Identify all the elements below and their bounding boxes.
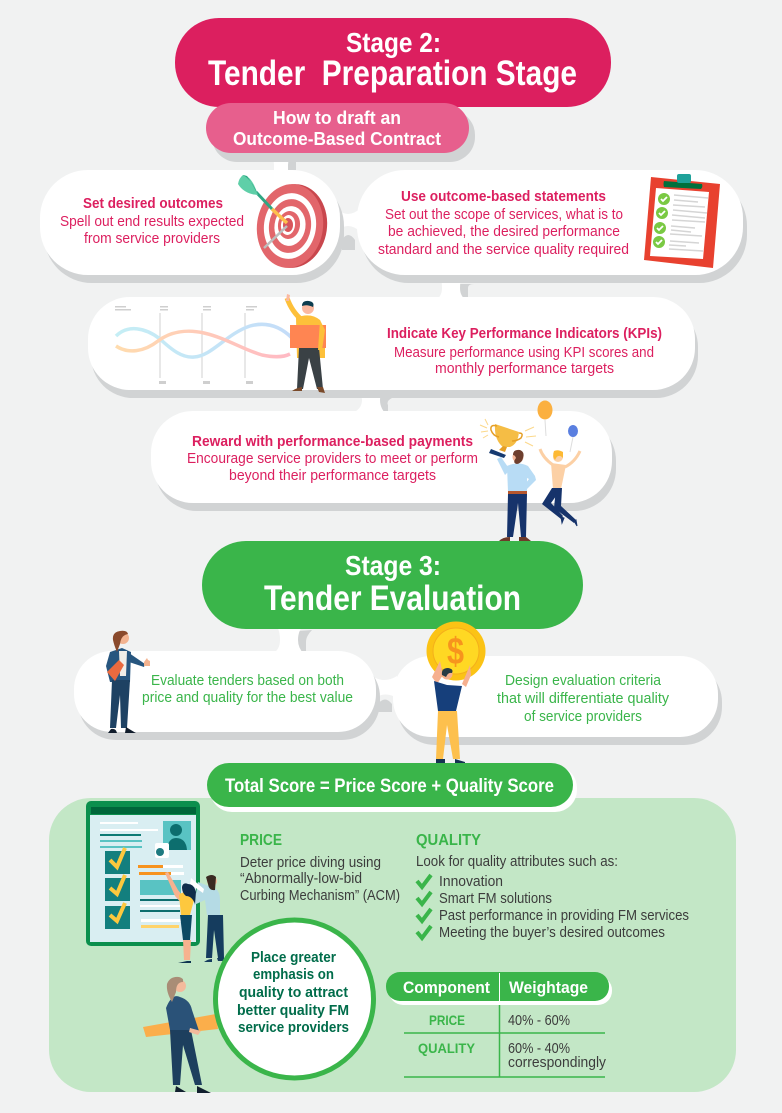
panel: price and quality evaluation: Evaluate tenders based on both (151, 672, 344, 689)
price block: Curbing Mechanism” (ACM) (240, 887, 400, 904)
connector shadows and links (268, 150, 474, 712)
panel: design evaluation criteria: Design evaluation criteria (505, 672, 662, 689)
table: component weightage: Weightage (509, 978, 588, 997)
illustration: woman carrying ruler (143, 977, 218, 1093)
stage 3 title pill (202, 541, 583, 629)
sub-heading text: How to draft an (273, 108, 401, 128)
panel: key performance indicators: monthly performance targets (435, 360, 614, 377)
table row: price: PRICE (429, 1012, 465, 1028)
table: component weightage: Component (403, 978, 490, 997)
price block (240, 832, 400, 904)
panel: score breakdown (49, 798, 736, 1092)
quality checklist: Meeting the buyer’s desired outcomes (439, 924, 665, 941)
callout: greater emphasis on quality: quality to attract (239, 984, 348, 1001)
table: component weightage: correspondingly (508, 1054, 606, 1071)
illustration: two colleagues at the tablet (165, 872, 224, 963)
price description: Deter price diving using (240, 854, 381, 871)
sub-heading pill: Outcome-Based Contract (233, 129, 441, 149)
quality checklist: Smart FM solutions (439, 890, 552, 907)
panel: outcome-based statements (357, 170, 747, 283)
price block: PRICE (240, 832, 282, 849)
quality checklist: Innovation (439, 873, 503, 890)
panel: performance-based payments: beyond their performance targets (229, 467, 436, 484)
quality checklist (417, 873, 689, 941)
icon: clipboard checklist (644, 174, 720, 268)
quality introduction: Look for quality attributes such as: (416, 853, 618, 870)
statements description: Set out the scope of services, what is to (385, 206, 623, 223)
callout: greater emphasis on quality: better quality FM (237, 1002, 349, 1019)
panel: set desired outcomes (40, 170, 344, 283)
KPI description: Measure performance using KPI scores and (394, 344, 654, 361)
callout: greater emphasis on quality: service providers (238, 1019, 349, 1036)
quality block (416, 832, 689, 941)
stage 2 heading: Tender Preparation Stage (208, 54, 577, 93)
icon: target with dart (238, 175, 333, 272)
panel: set desired outcomes: Set desired outcomes (83, 195, 223, 212)
panel: price and quality evaluation: price and quality for the best value (142, 689, 353, 706)
panel: design evaluation criteria: that will differentiate quality (497, 690, 669, 707)
payments description: Encourage service providers to meet or perform (187, 450, 478, 467)
callout: greater emphasis on quality: Place greater (251, 949, 336, 966)
panel: key performance indicators: Indicate Key Performance Indicators (KPIs) (387, 325, 662, 342)
panel: outcome-based statements: be achieved, the desired performance (388, 223, 620, 240)
callout: greater emphasis on quality: emphasis on (253, 966, 334, 983)
illustration: celebrating people with trophy and balloons (480, 400, 580, 541)
panel: set desired outcomes: from service providers (84, 230, 220, 247)
quality block: QUALITY (416, 832, 481, 849)
illustration: man lifting gold coin (426, 622, 486, 763)
panel: design evaluation criteria (393, 656, 722, 745)
panel: outcome-based statements: standard and the service quality required (378, 241, 629, 258)
panel: performance-based payments: Reward with performance-based payments (192, 433, 473, 450)
table: component weightage (386, 972, 612, 1077)
stage 2 title pill (175, 18, 611, 107)
total score pill (207, 763, 577, 812)
panel: performance-based payments (151, 411, 616, 511)
stage 3 label: Stage 3: (345, 550, 441, 581)
callout: greater emphasis on quality (216, 920, 374, 1078)
panel: outcome-based statements: Use outcome-based statements (401, 188, 606, 205)
outcomes description: Spell out end results expected (60, 213, 244, 230)
line chart (115, 306, 292, 384)
illustration: woman with folder giving thumbs up (106, 631, 150, 733)
price block: “Abnormally-low-bid (240, 870, 362, 887)
sub-heading pill (206, 103, 475, 162)
illustration: man holding orange board (286, 294, 326, 393)
table: component weightage: 40% - 60% (508, 1012, 570, 1029)
table row: quality: QUALITY (418, 1040, 476, 1056)
panel: design evaluation criteria: of service providers (524, 708, 642, 725)
panel: price and quality evaluation (74, 651, 380, 740)
total score pill: Total Score = Price Score + Quality Score (225, 776, 554, 797)
table: component weightage: 60% - 40% (508, 1040, 570, 1057)
illustration: man lifting gold coin: $ (447, 631, 464, 673)
illustration: tablet with checklist (86, 801, 200, 946)
panel: key performance indicators (88, 297, 698, 398)
stage 2 label: Stage 2: (346, 27, 441, 58)
quality checklist: Past performance in providing FM services (439, 907, 689, 924)
stage 3 heading: Tender Evaluation (264, 579, 521, 618)
